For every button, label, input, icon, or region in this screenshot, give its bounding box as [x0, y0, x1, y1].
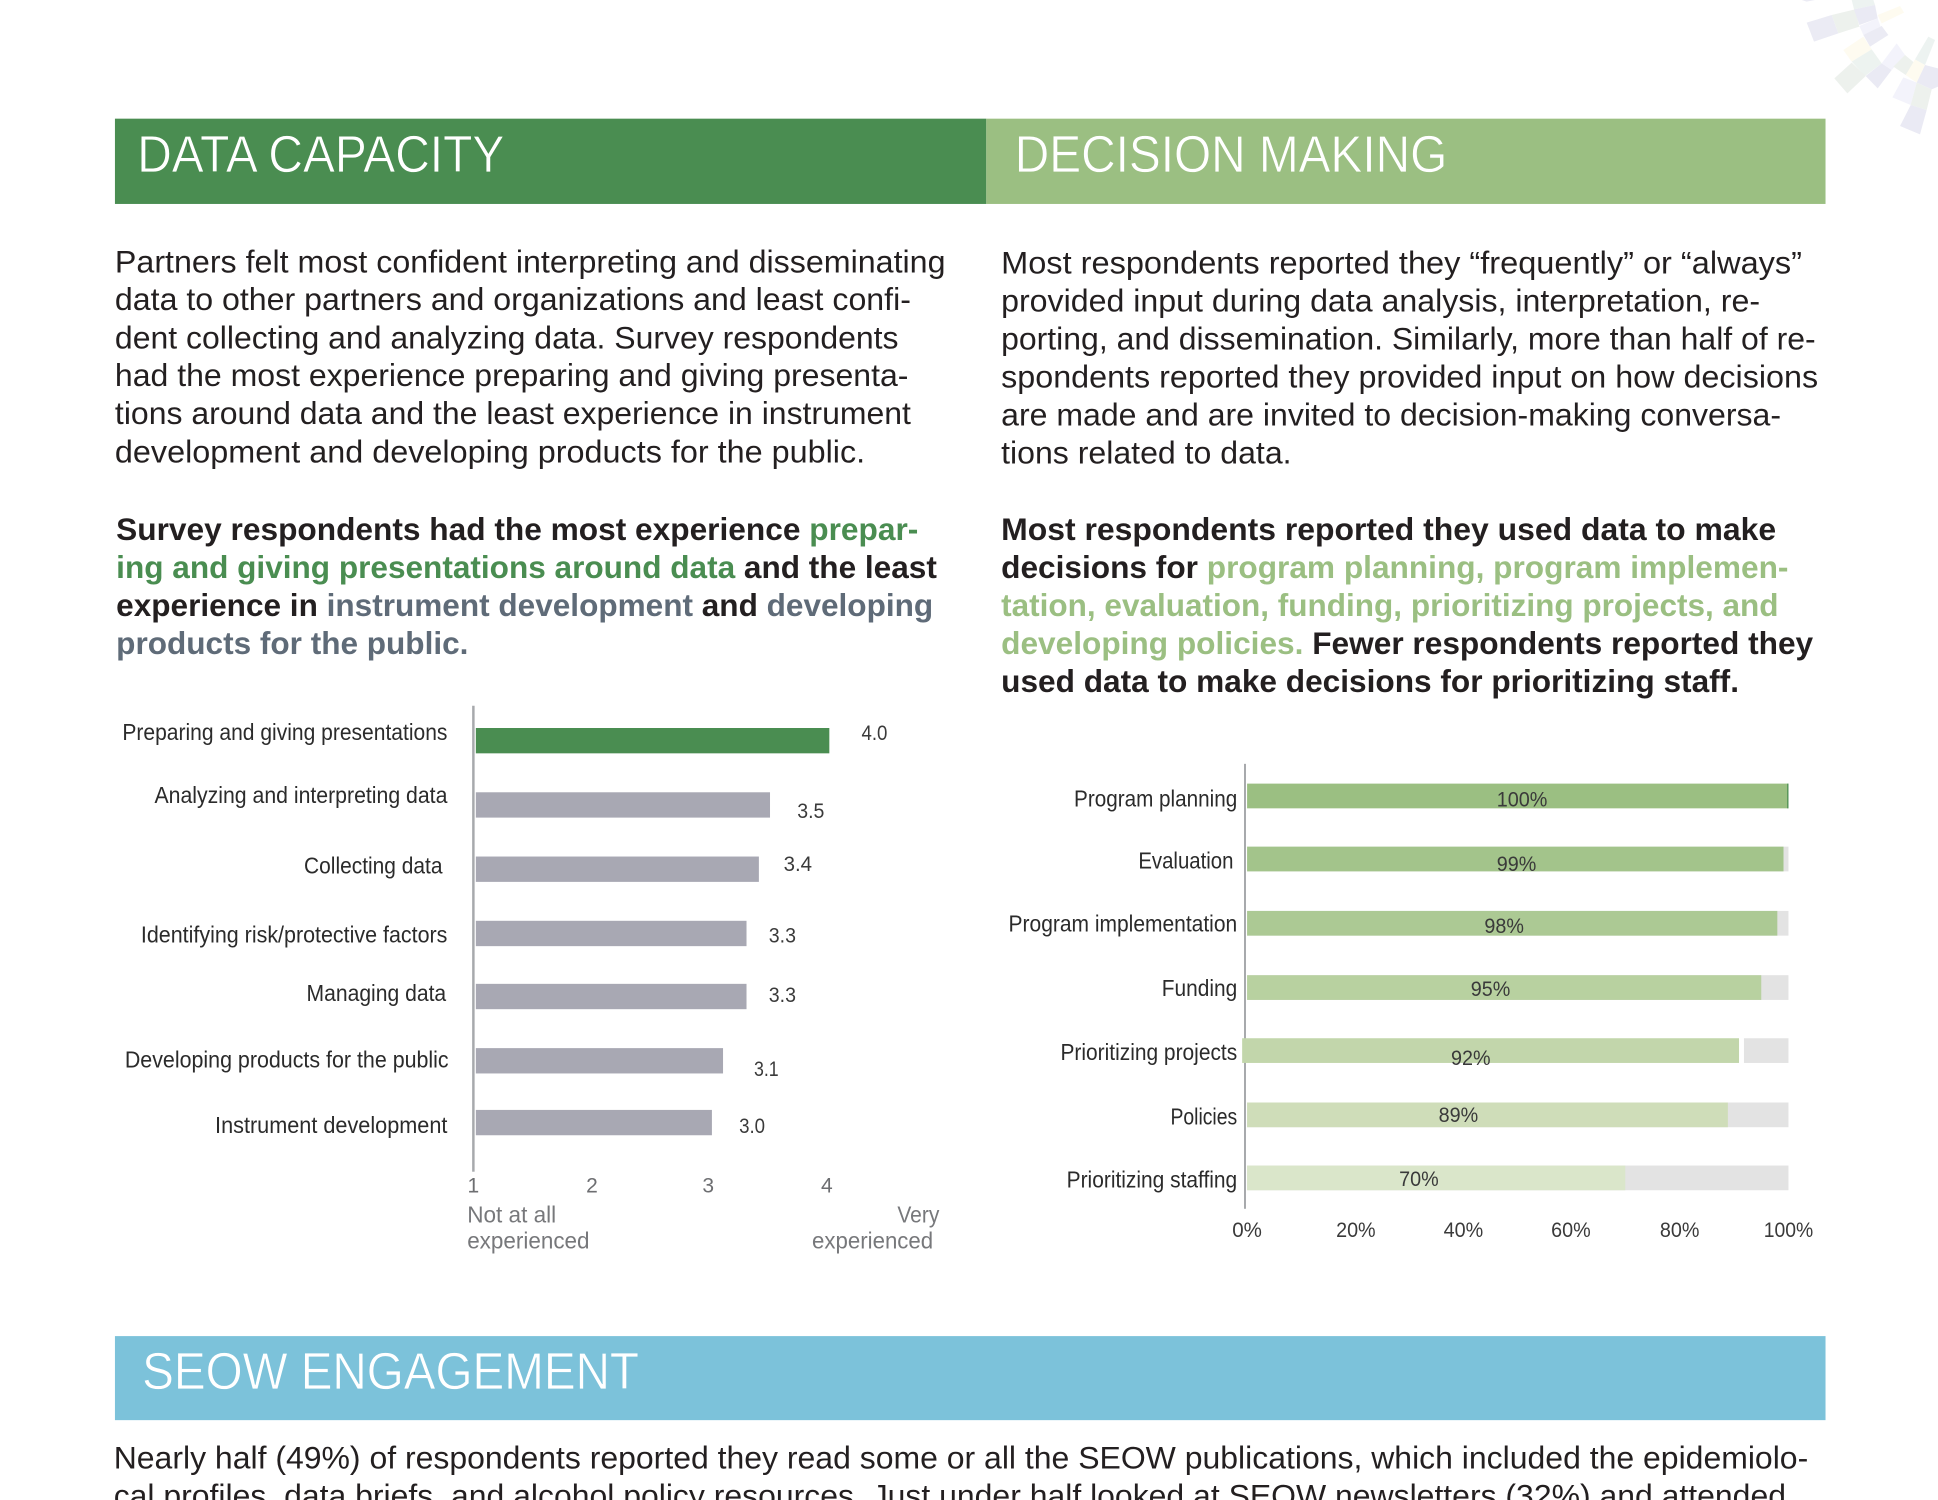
- text block: data capacity key finding: products for the public.: [116, 626, 468, 661]
- axis labels: experience scale: experienced: [812, 1227, 933, 1253]
- bar: policies: 89%: [1439, 1102, 1478, 1127]
- bar: preparing and giving presentations: [122, 719, 887, 753]
- text block: decision making intro: porting, and dissemination. Similarly, more than half of re-: [1001, 322, 1816, 357]
- axis labels: experience scale: Very: [897, 1201, 940, 1227]
- axis labels: experience scale: [467, 1175, 940, 1253]
- bar: prioritizing staffing: [1067, 1166, 1788, 1192]
- text block: SEOW engagement summary: [114, 1441, 1808, 1500]
- axis labels: experience scale: 2: [586, 1175, 598, 1198]
- text block: decision making key finding: decisions for program planning, program implemen-: [1001, 550, 1788, 585]
- bar: evaluation: 99%: [1497, 851, 1536, 876]
- axis labels: percent scale: 100%: [1764, 1217, 1813, 1242]
- bar: prioritizing projects: 92%: [1451, 1045, 1491, 1070]
- bar: program planning: Program planning: [1074, 786, 1237, 812]
- text block: data capacity key finding: Survey respondents had the most experience prepar-: [116, 512, 918, 547]
- text block: decision making key finding: tation, evaluation, funding, prioritizing projects, and: [1001, 588, 1779, 623]
- bar: collecting data: Collecting data: [304, 852, 443, 878]
- axis labels: percent scale: 0%: [1232, 1217, 1262, 1242]
- text block: data capacity key finding: experience in instrument development and developing: [116, 588, 933, 623]
- bar: program planning: [1074, 784, 1788, 812]
- heading: decision making: [986, 119, 1826, 204]
- bar: analyzing and interpreting data: Analyzing and interpreting data: [154, 782, 448, 808]
- bar: evaluation: Evaluation: [1138, 848, 1233, 874]
- heading: data capacity: [115, 119, 986, 204]
- text block: decision making key finding: [1001, 512, 1814, 699]
- axis labels: experience scale: experienced: [467, 1227, 590, 1253]
- axis labels: experience scale: Not at all: [467, 1201, 556, 1227]
- bar: developing products for the public: Developing products for the public: [125, 1047, 449, 1073]
- bar chart: experience ratings: [122, 706, 940, 1253]
- bar: program implementation: [1009, 911, 1788, 938]
- text block: decision making intro: [1001, 246, 1818, 471]
- text block: data capacity intro: Partners felt most confident interpreting and disseminating: [115, 244, 946, 279]
- icon: decorative corner mosaic: [1802, 0, 1938, 134]
- bar: funding: [1162, 975, 1788, 1001]
- text block: data capacity intro: data to other partners and organizations and least confi-: [115, 282, 911, 317]
- text block: data capacity intro: had the most experience preparing and giving presenta-: [115, 358, 908, 393]
- bar: collecting data: [304, 851, 812, 882]
- text block: decision making intro: are made and are invited to decision-making conversa-: [1001, 397, 1781, 432]
- text block: decision making key finding: used data to make decisions for prioritizing staff.: [1001, 664, 1739, 699]
- axis labels: percent scale: 40%: [1444, 1217, 1483, 1242]
- bar: managing data: Managing data: [307, 980, 447, 1006]
- bar: instrument development: [215, 1110, 765, 1138]
- bar: identifying risk/protective factors: [141, 921, 796, 948]
- bar: developing products for the public: [125, 1047, 779, 1081]
- bar: policies: [1170, 1102, 1788, 1129]
- heading: SEOW engagement: [115, 1336, 1826, 1420]
- bar: instrument development: 3.0: [739, 1113, 765, 1138]
- bar: instrument development: Instrument development: [215, 1112, 448, 1138]
- bar: program implementation: 98%: [1484, 913, 1524, 938]
- panel: data capacity: [115, 119, 986, 1253]
- axis labels: percent scale: 80%: [1660, 1217, 1699, 1242]
- axis labels: percent scale: [1232, 1217, 1813, 1242]
- bar: identifying risk/protective factors: 3.3: [769, 923, 796, 948]
- bar: analyzing and interpreting data: [154, 782, 824, 823]
- bar: prioritizing staffing: 70%: [1399, 1166, 1439, 1191]
- bar: policies: Policies: [1170, 1103, 1237, 1129]
- heading: data capacity: DATA CAPACITY: [137, 126, 504, 184]
- text block: data capacity key finding: [116, 512, 937, 661]
- text block: data capacity key finding: ing and giving presentations around data and the least: [116, 550, 937, 585]
- text block: decision making key finding: Most respondents reported they used data to make: [1001, 512, 1776, 547]
- text block: SEOW engagement summary: Nearly half (49%) of respondents reported they read some or all the SEOW publications, which included the epidemiolo-: [114, 1441, 1808, 1476]
- bar: funding: 95%: [1471, 976, 1510, 1001]
- axis labels: experience scale: 4: [821, 1175, 833, 1198]
- text block: decision making intro: Most respondents reported they “frequently” or “always”: [1001, 246, 1802, 281]
- text block: data capacity intro: tions around data and the least experience in instrument: [115, 396, 911, 431]
- bar: program implementation: Program implementation: [1009, 911, 1237, 937]
- axis labels: percent scale: 20%: [1336, 1217, 1376, 1242]
- bar: funding: Funding: [1162, 975, 1237, 1001]
- bar: developing products for the public: 3.1: [754, 1056, 779, 1081]
- text block: data capacity intro: [115, 244, 946, 469]
- text block: decision making intro: spondents reported they provided input on how decisions: [1001, 359, 1818, 394]
- text block: decision making key finding: developing policies. Fewer respondents reported they: [1001, 626, 1814, 661]
- panel: SEOW engagement: [114, 1336, 1826, 1500]
- text block: decision making intro: tions related to data.: [1001, 436, 1292, 471]
- axis labels: experience scale: 1: [468, 1175, 479, 1198]
- bar: prioritizing projects: [1060, 1038, 1788, 1070]
- bar: analyzing and interpreting data: 3.5: [797, 798, 824, 823]
- bar: managing data: [307, 980, 796, 1009]
- panel: decision making: [986, 119, 1826, 1242]
- bar: preparing and giving presentations: Preparing and giving presentations: [122, 719, 447, 745]
- bar: evaluation: [1138, 847, 1788, 876]
- bar: prioritizing projects: Prioritizing projects: [1060, 1039, 1237, 1065]
- heading: decision making: DECISION MAKING: [1015, 126, 1447, 184]
- axis labels: percent scale: 60%: [1551, 1217, 1591, 1242]
- bar chart: uses of data for decisions: [1009, 764, 1813, 1242]
- bar: identifying risk/protective factors: Identifying risk/protective factors: [141, 922, 447, 948]
- bar: program planning: 100%: [1497, 787, 1547, 812]
- bar: prioritizing staffing: Prioritizing staffing: [1067, 1166, 1237, 1192]
- bar: preparing and giving presentations: 4.0: [861, 720, 887, 745]
- text block: data capacity intro: dent collecting and analyzing data. Survey respondents: [115, 320, 899, 355]
- axis labels: experience scale: 3: [702, 1175, 714, 1198]
- text block: decision making intro: provided input during data analysis, interpretation, re-: [1001, 283, 1760, 318]
- text block: data capacity intro: development and developing products for the public.: [115, 434, 865, 469]
- bar: managing data: 3.3: [769, 982, 796, 1007]
- bar: collecting data: 3.4: [784, 851, 812, 876]
- heading: SEOW engagement: SEOW ENGAGEMENT: [142, 1343, 639, 1401]
